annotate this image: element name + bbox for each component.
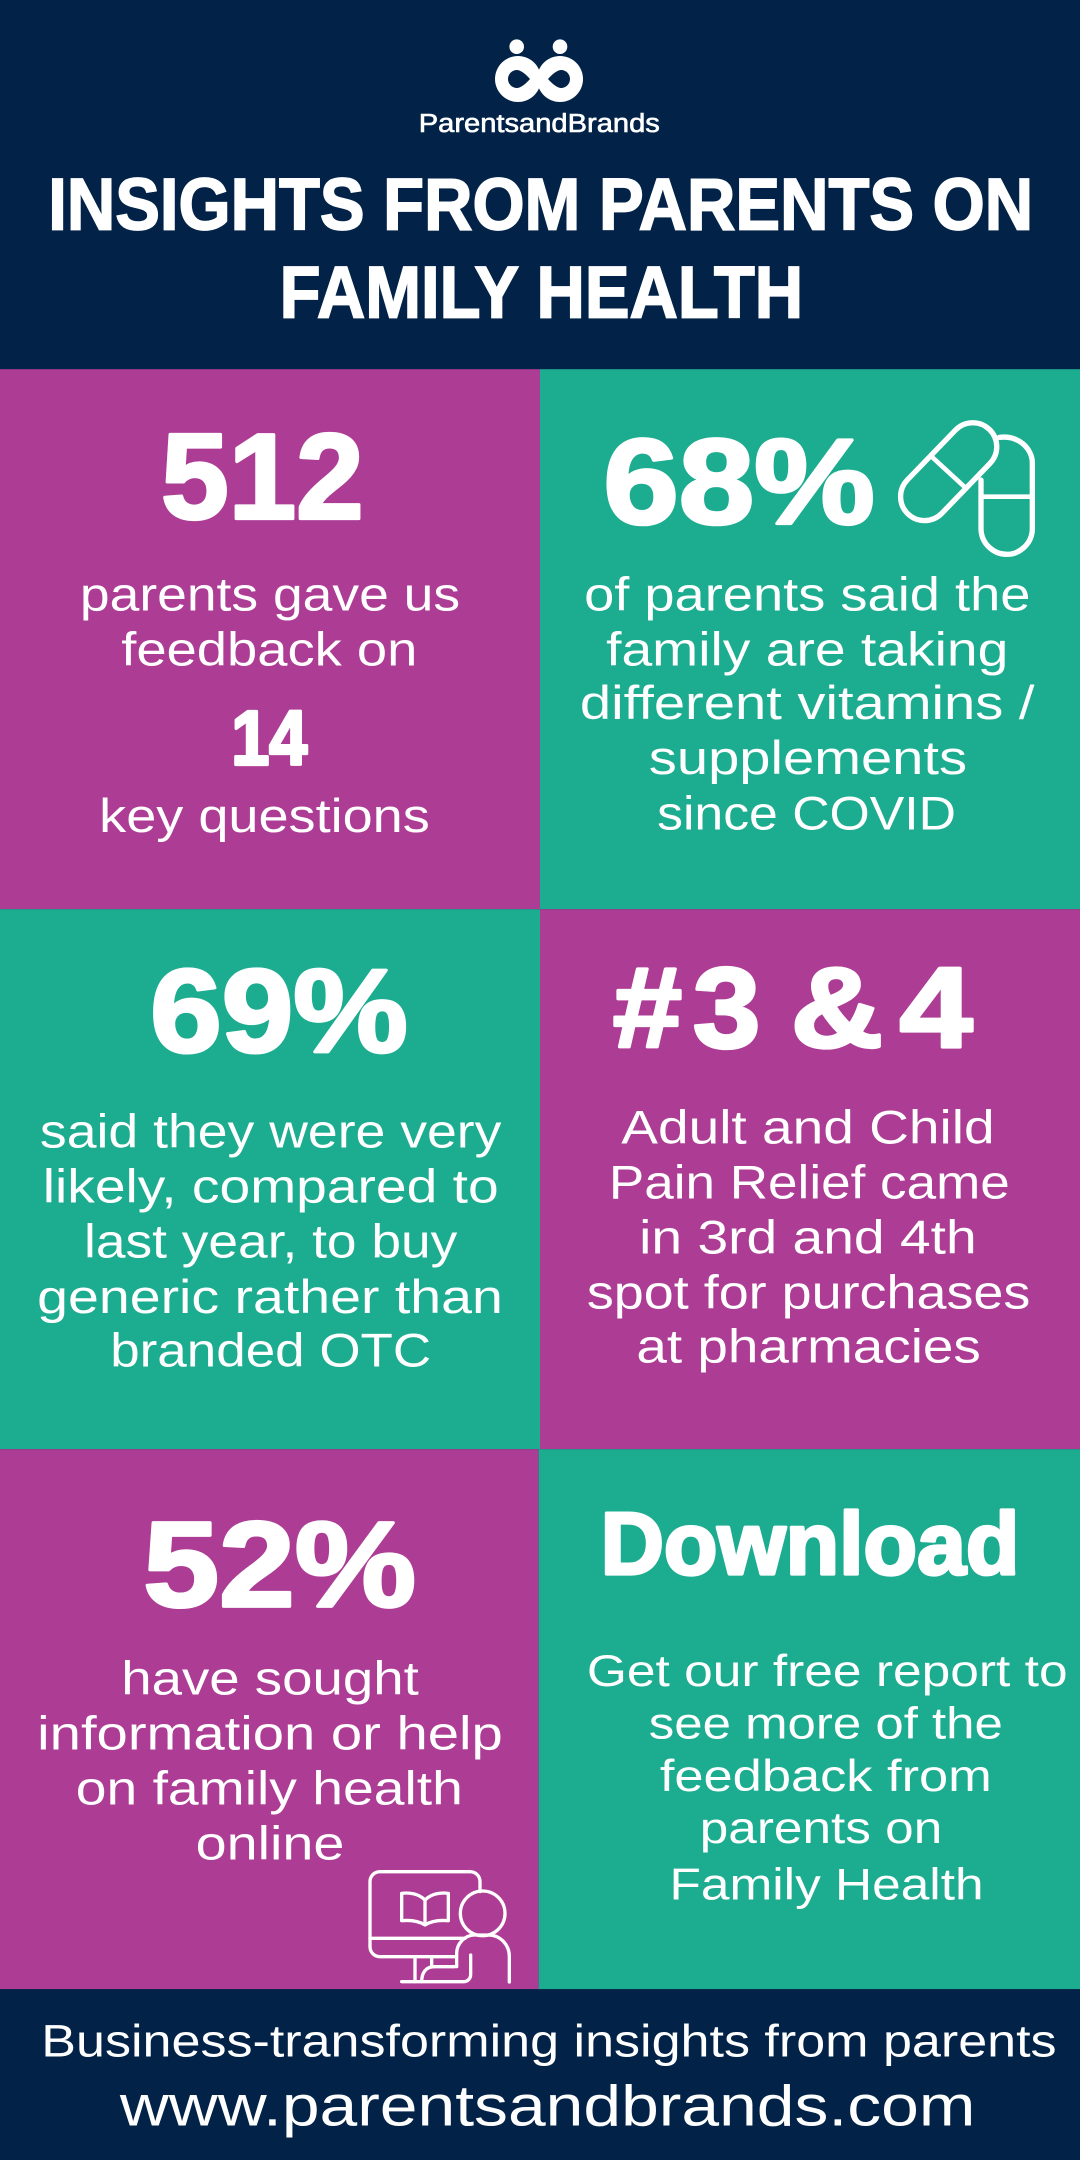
text: pain relief statement: in 3rd and 4th: [639, 1212, 977, 1264]
text: online statement: information or help: [37, 1707, 503, 1759]
title: [48, 164, 1033, 334]
text: vitamins statement: different vitamins /: [580, 677, 1036, 729]
text: report invitation: see more of the: [649, 1698, 1003, 1748]
stat: 14: 14: [231, 696, 307, 782]
icon: parents and brands infinity mark: [495, 39, 583, 102]
stat: #3 & 4: #: [613, 945, 682, 1072]
text: generic statement: generic rather than: [37, 1271, 503, 1323]
text: pain relief statement: Adult and Child: [621, 1101, 995, 1153]
stat: 512: 512: [161, 409, 364, 545]
text: vitamins statement: since COVID: [657, 787, 956, 839]
text: key questions: key questions: [99, 790, 430, 842]
text: online statement: have sought: [121, 1652, 419, 1704]
heading: Download: Download: [601, 1494, 1019, 1593]
title: FAMILY HEALTH: [280, 253, 803, 334]
text: online statement: on family health: [76, 1763, 463, 1815]
icon: person at computer with book: [370, 1872, 509, 1982]
text: generic statement: branded OTC: [110, 1325, 431, 1377]
text: pain relief statement: spot for purchases: [587, 1267, 1030, 1319]
text: report invitation: feedback from: [660, 1751, 992, 1801]
stat: #3 & 4: &: [791, 945, 883, 1072]
footer panel: [0, 1989, 1080, 2160]
panel: download report: [539, 1449, 1080, 1989]
text: generic statement: [37, 1106, 503, 1377]
text: vitamins statement: supplements: [649, 732, 967, 784]
text: report invitation: [587, 1646, 1068, 1910]
text: vitamins statement: [580, 568, 1036, 839]
panel: 69% generic: [0, 909, 540, 1449]
stat: 69%: 69%: [150, 946, 408, 1078]
icon: capsules: [891, 413, 1032, 554]
text: report invitation: parents on: [700, 1803, 942, 1853]
logo: [419, 39, 660, 138]
text: vitamins statement: family are taking: [606, 623, 1008, 675]
text: report invitation: Get our free report to: [587, 1646, 1068, 1696]
text: generic statement: likely, compared to: [43, 1161, 499, 1213]
text: pain relief statement: Pain Relief came: [609, 1156, 1010, 1208]
text: parents gave us feedback on: parents gave us: [80, 568, 460, 620]
text: parents gave us feedback on: feedback on: [121, 623, 417, 675]
text: online statement: online: [196, 1818, 344, 1870]
text: online statement: [37, 1652, 503, 1870]
text: pain relief statement: [587, 1101, 1030, 1372]
stat: #3 & 4: 4: [900, 945, 973, 1072]
text: generic statement: said they were very: [40, 1105, 502, 1157]
footer website: www.parentsandbrands.com: [119, 2075, 975, 2139]
text: report invitation: Family Health: [669, 1860, 984, 1910]
footer tagline: Business-transforming insights from parents: [41, 2016, 1057, 2067]
panel: 512 parents: [0, 369, 540, 909]
text: vitamins statement: of parents said the: [584, 568, 1030, 620]
text: parents gave us feedback on: [80, 568, 460, 675]
text: generic statement: last year, to buy: [84, 1216, 458, 1268]
text: pain relief statement: at pharmacies: [636, 1320, 981, 1372]
stat: #3 & 4: [613, 945, 973, 1072]
stat: #3 & 4: 3: [693, 945, 760, 1072]
stat: 52%: 52%: [143, 1496, 416, 1632]
header panel: [0, 0, 1080, 369]
panel: 52% online: [0, 1449, 539, 1989]
stat: 68%: 68%: [603, 413, 875, 549]
panel: #3 and 4 pain relief: [540, 909, 1080, 1449]
panel: 68% vitamins: [540, 369, 1080, 909]
logo wordmark: ParentsandBrands: [419, 108, 660, 138]
